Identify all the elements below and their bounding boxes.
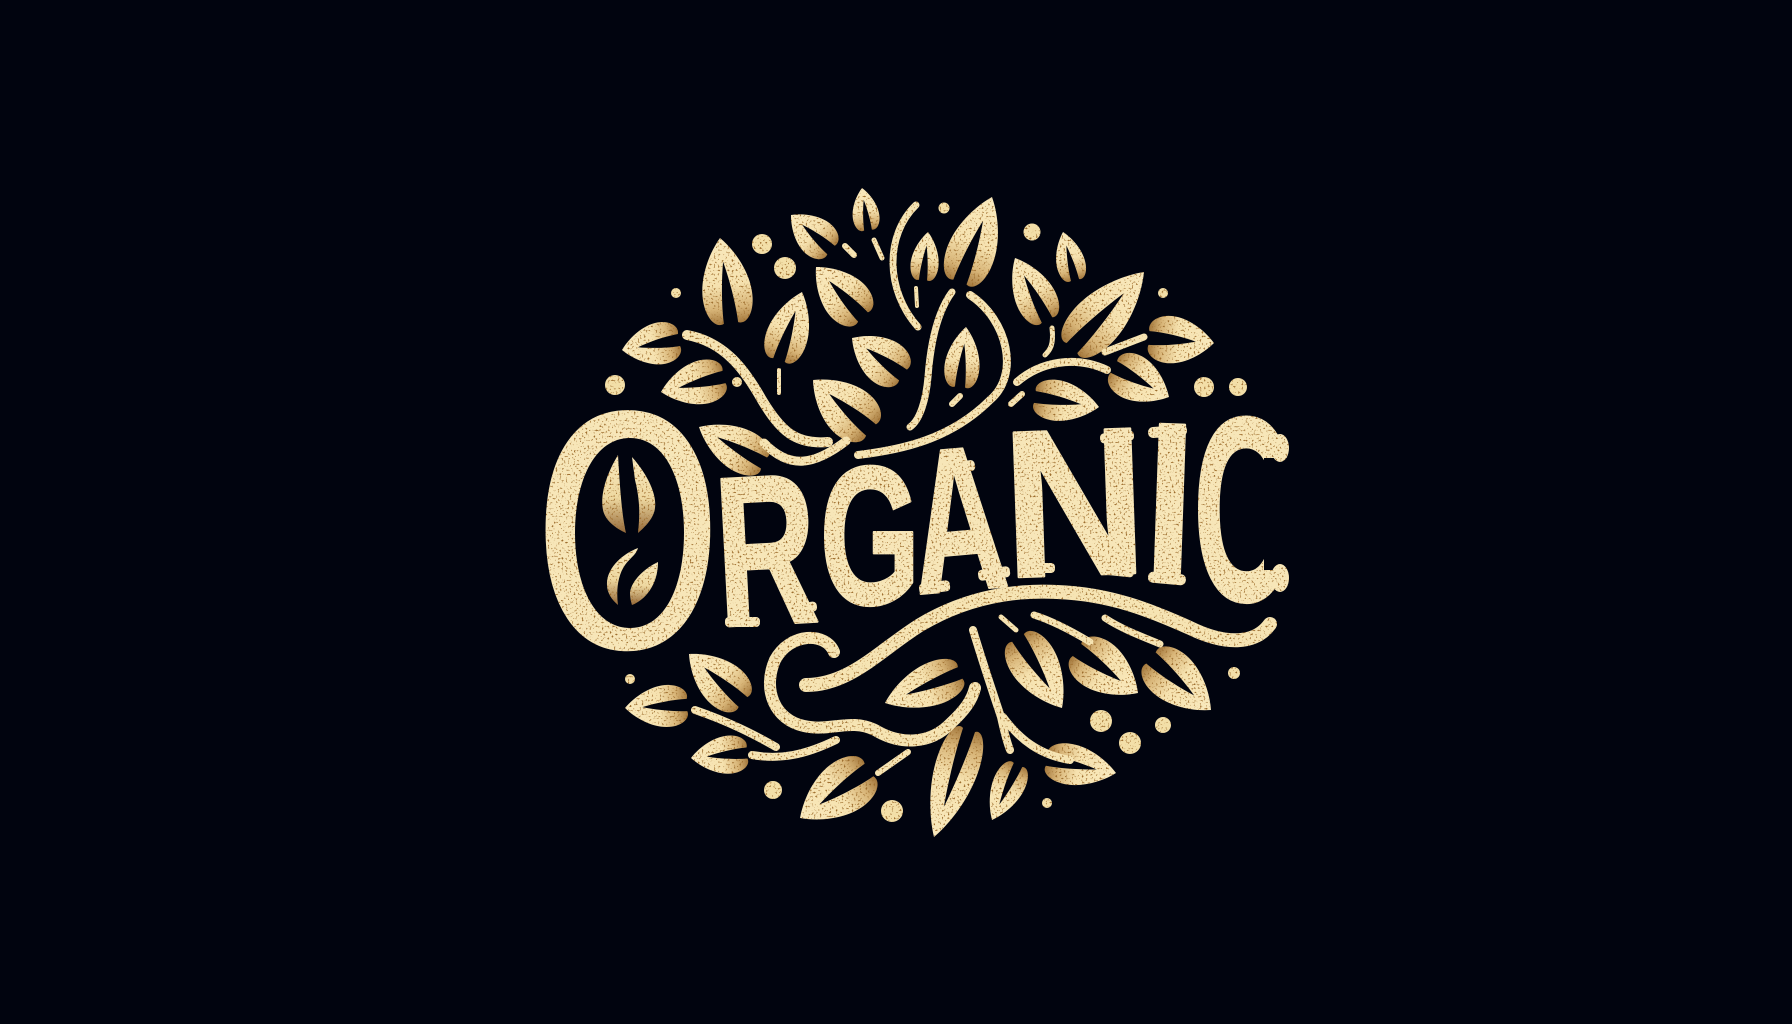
letter O: O [537, 344, 719, 718]
upper foliage wreath [605, 186, 1247, 482]
ORGANIC wordmark [537, 344, 1293, 718]
organic logo emblem [537, 186, 1293, 844]
opening of letter C [1264, 458, 1300, 570]
lower leaves [624, 625, 1227, 844]
letter C: C [1193, 364, 1293, 656]
letter N: N [999, 383, 1150, 623]
upper stems [687, 205, 1144, 461]
lower dots [625, 667, 1240, 822]
upper leaves [618, 186, 1216, 482]
inside of letter O [575, 438, 684, 628]
letter R: R [709, 429, 823, 673]
letter G: G [819, 425, 921, 647]
lower swash and stems [695, 592, 1270, 773]
upper dots [605, 202, 1247, 397]
letter A: A [901, 403, 1015, 638]
lower foliage wreath [624, 592, 1270, 844]
details over the wordmark [602, 434, 1289, 605]
rounded ends of letter C [1271, 434, 1289, 592]
letter I: I [1141, 376, 1198, 632]
icon: seed leaves inside O [602, 455, 658, 605]
